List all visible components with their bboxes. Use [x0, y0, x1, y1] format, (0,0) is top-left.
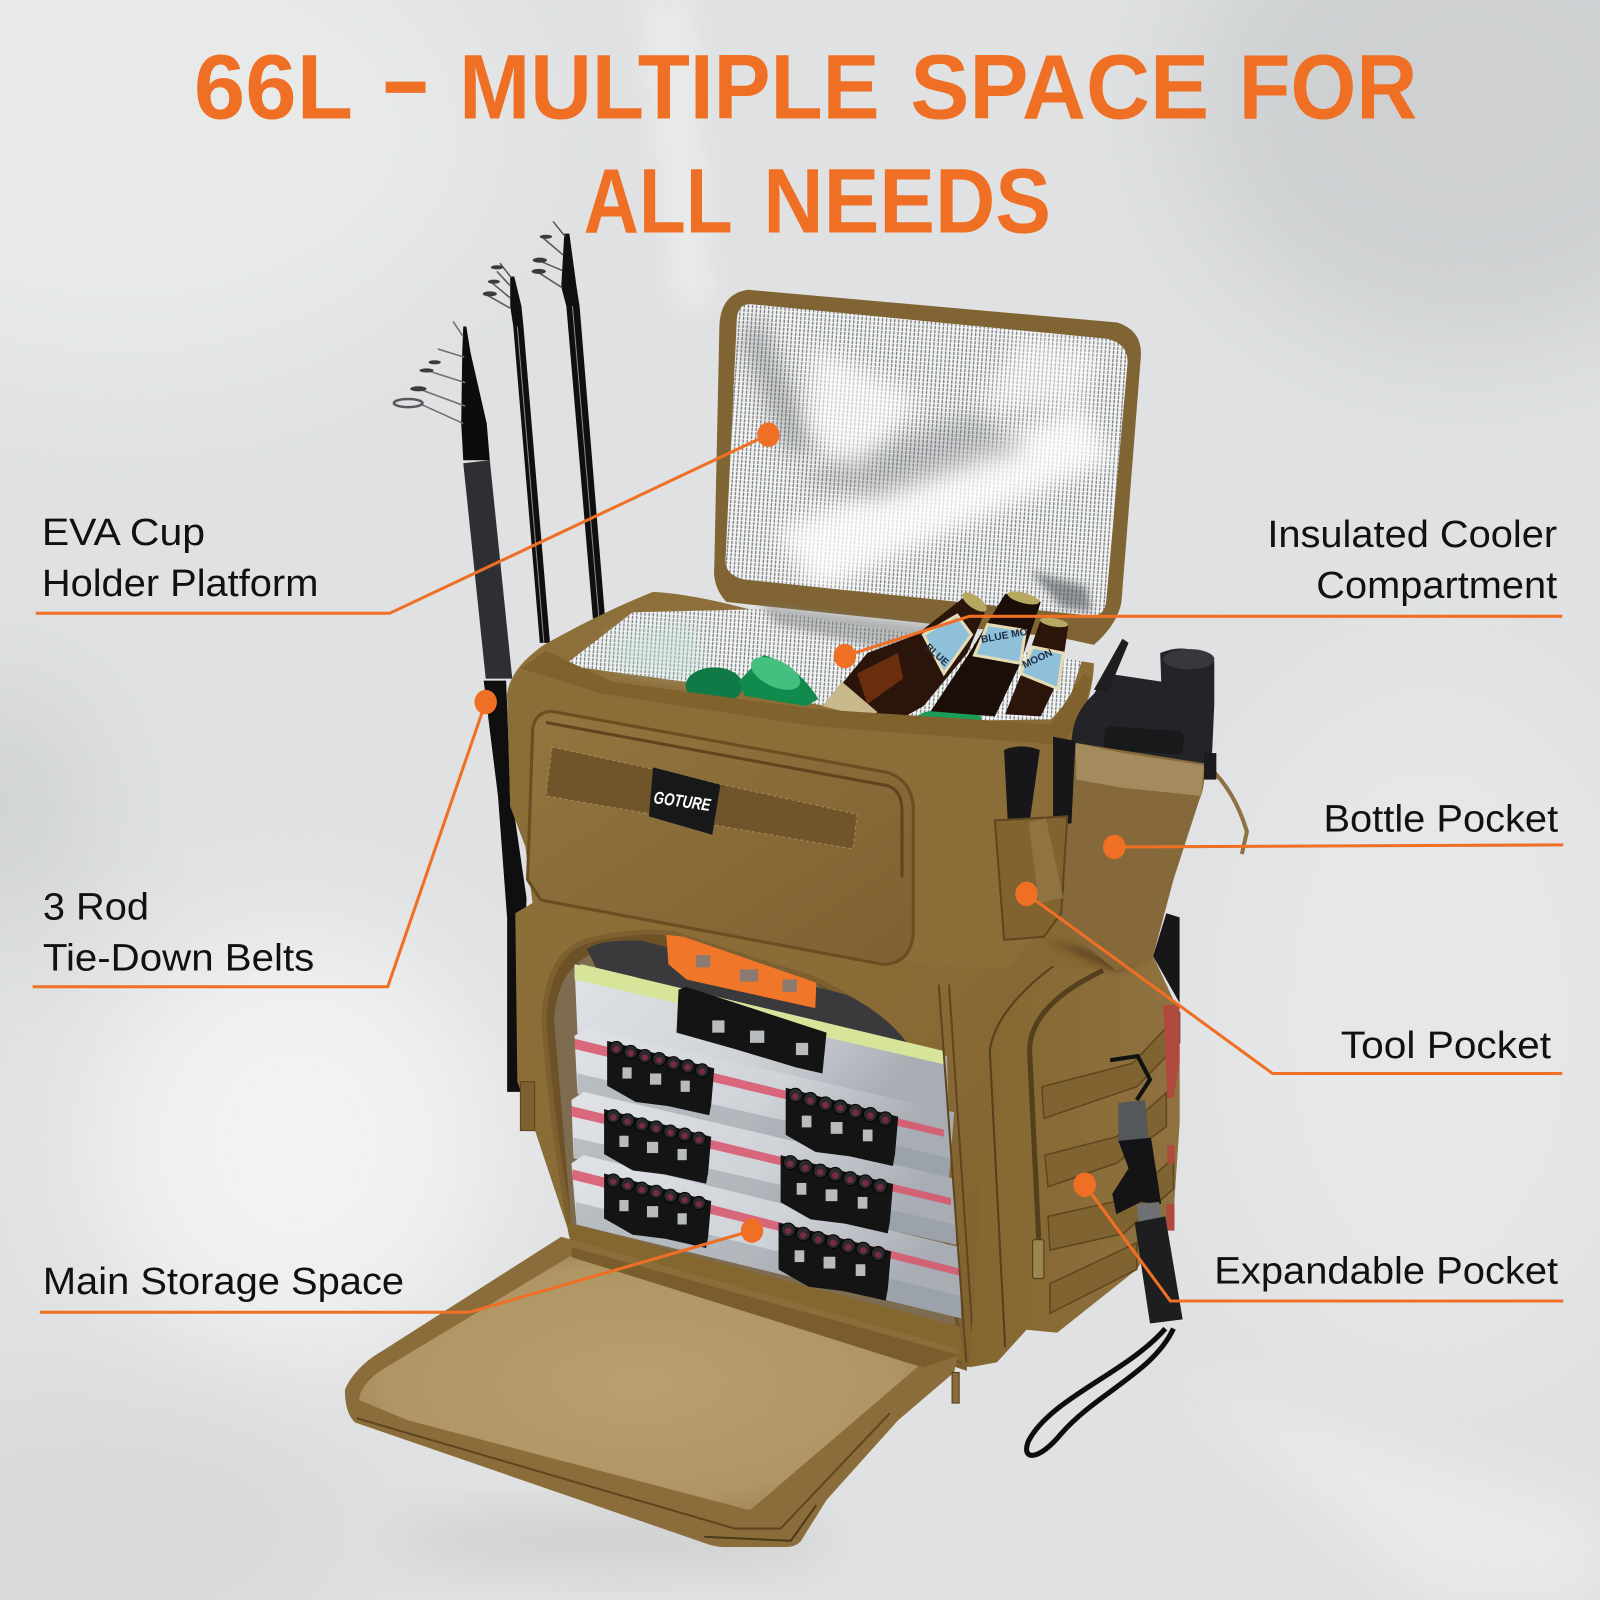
label: Main Storage Space	[43, 1260, 404, 1302]
bag body	[33, 422, 1563, 1547]
leader	[834, 616, 1562, 668]
label: EVA Cup	[42, 511, 205, 553]
label: Insulated Cooler	[1267, 513, 1557, 555]
callout: EVA Cup Holder Platform	[36, 422, 780, 613]
label: Tie-Down Belts	[43, 936, 314, 978]
black back box	[587, 940, 918, 1061]
tool pocket	[995, 737, 1076, 940]
box 1	[574, 964, 949, 1122]
leader	[1073, 1172, 1563, 1301]
callout: Insulated Cooler Compartment	[834, 513, 1562, 668]
pocket shadow	[1046, 940, 1153, 970]
title: ALL	[584, 151, 733, 253]
label	[43, 885, 314, 978]
title: MULTIPLE	[459, 36, 880, 138]
rod 1	[394, 321, 527, 1092]
fishing rods	[394, 221, 605, 1092]
cooler opening	[564, 589, 1082, 728]
box 3	[571, 1092, 956, 1245]
orange handle	[666, 935, 816, 1008]
side tag	[520, 1082, 535, 1131]
callout: Expandable Pocket	[1073, 1172, 1563, 1301]
zipper	[1030, 970, 1103, 1240]
callout: Bottle Pocket	[1103, 798, 1563, 859]
cooler lid	[714, 290, 1143, 645]
title	[194, 36, 1417, 253]
leader	[1103, 835, 1563, 859]
main storage opening	[544, 932, 964, 1367]
label: Holder Platform	[42, 562, 318, 604]
latches	[604, 1041, 898, 1301]
box 2	[574, 1029, 954, 1179]
lid silver lining	[725, 304, 1128, 615]
callout: Tool Pocket	[1015, 882, 1562, 1073]
fold-down front flap	[345, 1237, 959, 1547]
logo patch: GOTURE	[653, 787, 712, 815]
bottle pocket	[1051, 743, 1247, 970]
label: 3 Rod	[43, 885, 149, 927]
title: SPACE	[910, 36, 1209, 138]
bottle labels: MOON	[1021, 648, 1054, 671]
label: Bottle Pocket	[1323, 798, 1559, 840]
logo patch	[649, 767, 720, 835]
label: Expandable Pocket	[1214, 1250, 1559, 1292]
cooler upper wall	[507, 668, 1061, 969]
green cans	[686, 650, 982, 728]
bottle labels: BLUE MO	[980, 627, 1028, 646]
tool handle and cord	[1027, 1056, 1183, 1455]
leader	[36, 422, 780, 613]
bottle	[1071, 639, 1214, 767]
callout: 3 Rod Tie-Down Belts	[33, 690, 497, 987]
label: Compartment	[1316, 564, 1558, 606]
label: Tool Pocket	[1341, 1024, 1552, 1066]
callout: Main Storage Space	[40, 1218, 763, 1312]
leader	[40, 1218, 763, 1312]
title: 66L	[194, 36, 353, 138]
bottle labels: BLUE	[922, 642, 951, 669]
title: NEEDS	[763, 151, 1051, 253]
lower seams	[939, 985, 974, 1362]
bottle labels	[922, 615, 1063, 689]
title: FOR	[1239, 36, 1417, 138]
tackle boxes	[571, 935, 961, 1318]
front pocket	[528, 711, 913, 964]
webbing straps	[1042, 1013, 1180, 1313]
leader	[33, 690, 497, 987]
label	[1267, 513, 1558, 606]
cooler front rim	[520, 651, 1092, 745]
rod 3	[532, 221, 605, 618]
label	[42, 511, 318, 604]
top latch	[677, 987, 827, 1073]
rod 2	[483, 263, 550, 643]
bottom lip	[566, 1222, 964, 1362]
leader	[1015, 882, 1562, 1073]
side pocket	[969, 913, 1180, 1367]
side black handle	[1153, 913, 1180, 1003]
beer bottles	[822, 589, 1069, 720]
box 4	[571, 1155, 961, 1318]
velcro strip	[546, 747, 857, 849]
red cord	[1163, 1005, 1180, 1231]
